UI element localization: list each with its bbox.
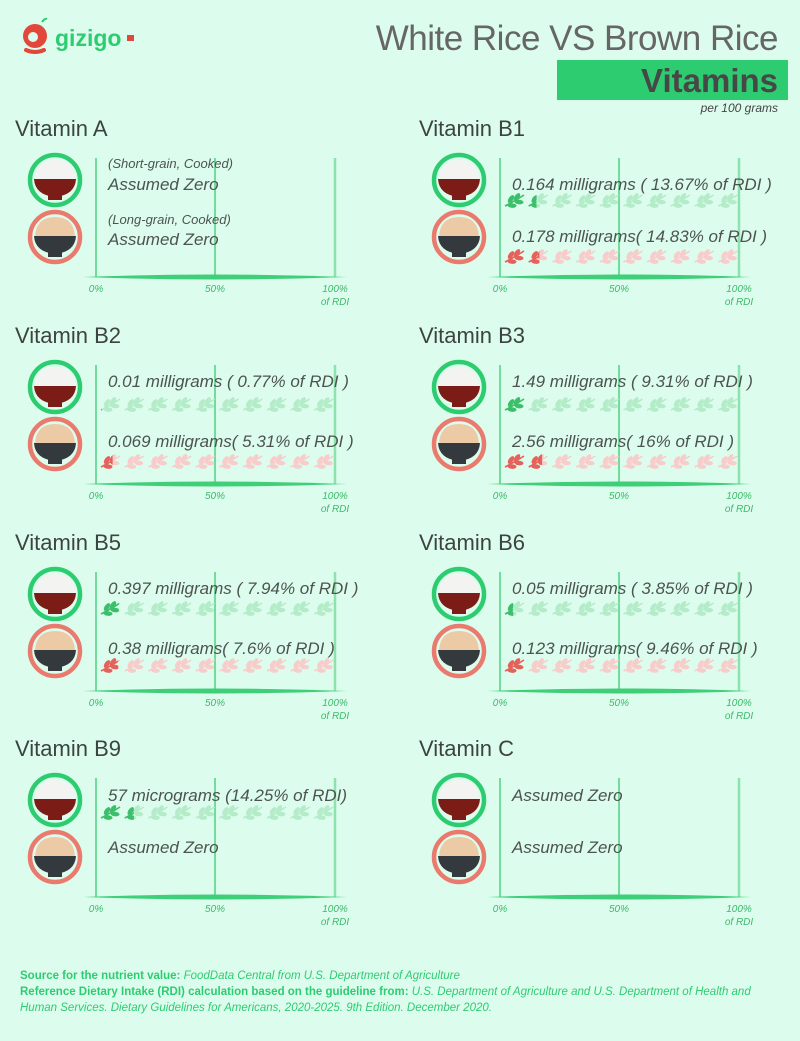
panel: Vitamin B2: Vitamin B2	[15, 323, 121, 348]
panel: Vitamin A: Assumed Zero	[107, 175, 219, 194]
panel: Vitamin B2	[15, 323, 354, 515]
panel: Vitamin B9	[15, 736, 349, 928]
logo	[23, 19, 134, 52]
subtitle box: Vitamins: Vitamins	[641, 62, 778, 99]
panel: Vitamin B6: Vitamin B6	[419, 530, 525, 555]
panel: Vitamin B1: Vitamin B1	[419, 116, 525, 141]
panel: Vitamin B6: 0.123 milligrams( 9.46% of RDI )	[512, 639, 758, 658]
panel: Vitamin B3: 1.49 milligrams ( 9.31% of RDI )	[512, 372, 753, 391]
panel: Vitamin C: Vitamin C	[419, 736, 514, 761]
panel: Vitamin A: Assumed Zero	[107, 230, 219, 249]
panel: Vitamin B3: Vitamin B3	[419, 323, 525, 348]
footer: sources: Reference Dietary Intake (RDI) calculation based on the guideline from: U.S. Department of Agriculture and U.S. Department of Health and	[20, 986, 751, 998]
panel: Vitamin B6: 0.05 milligrams ( 3.85% of RDI )	[512, 579, 753, 598]
panel: Vitamin A: (Short-grain, Cooked)	[108, 156, 233, 171]
subtitle box: Vitamins	[557, 60, 788, 100]
panel: Vitamin B3	[419, 323, 753, 515]
footer: sources: Human Services. Dietary Guidelines for Americans, 2020-2025. 9th Edition. December 2020.	[20, 1002, 492, 1014]
panel: Vitamin B1: 0.164 milligrams ( 13.67% of RDI )	[512, 175, 772, 194]
panel: Vitamin B5: 0.397 milligrams ( 7.94% of RDI )	[108, 579, 358, 598]
logo: gizigo	[55, 25, 121, 51]
title: White Rice VS Brown Rice	[376, 19, 778, 58]
footer: sources: Source for the nutrient value: FoodData Central from U.S. Department of Agriculture	[20, 970, 460, 982]
panel: Vitamin B3: 2.56 milligrams( 16% of RDI )	[511, 432, 734, 451]
panel: Vitamin A: (Long-grain, Cooked)	[108, 212, 231, 227]
panel: Vitamin C	[419, 736, 753, 928]
panel: Vitamin B9: 57 micrograms (14.25% of RDI)	[108, 786, 347, 805]
footer: sources	[20, 970, 751, 1014]
panel: Vitamin A: Vitamin A	[15, 116, 108, 141]
panel: Vitamin B5	[15, 530, 358, 722]
panel: Vitamin B5: 0.38 milligrams( 7.6% of RDI )	[108, 639, 335, 658]
panel: Vitamin B9: Assumed Zero	[107, 838, 219, 857]
panel: Vitamin A	[15, 116, 349, 308]
panel: Vitamin B1	[419, 116, 772, 308]
panel: Vitamin C: Assumed Zero	[511, 838, 623, 857]
panel: Vitamin B2: 0.01 milligrams ( 0.77% of RDI )	[108, 372, 349, 391]
panel: Vitamin B9: Vitamin B9	[15, 736, 121, 761]
panel: Vitamin B5: Vitamin B5	[15, 530, 121, 555]
per 100 grams note: per 100 grams	[700, 101, 778, 115]
panel: Vitamin B2: 0.069 milligrams( 5.31% of RDI )	[108, 432, 354, 451]
panel: Vitamin B1: 0.178 milligrams( 14.83% of RDI )	[512, 227, 767, 246]
panel: Vitamin B6	[419, 530, 758, 722]
panel: Vitamin C: Assumed Zero	[511, 786, 623, 805]
